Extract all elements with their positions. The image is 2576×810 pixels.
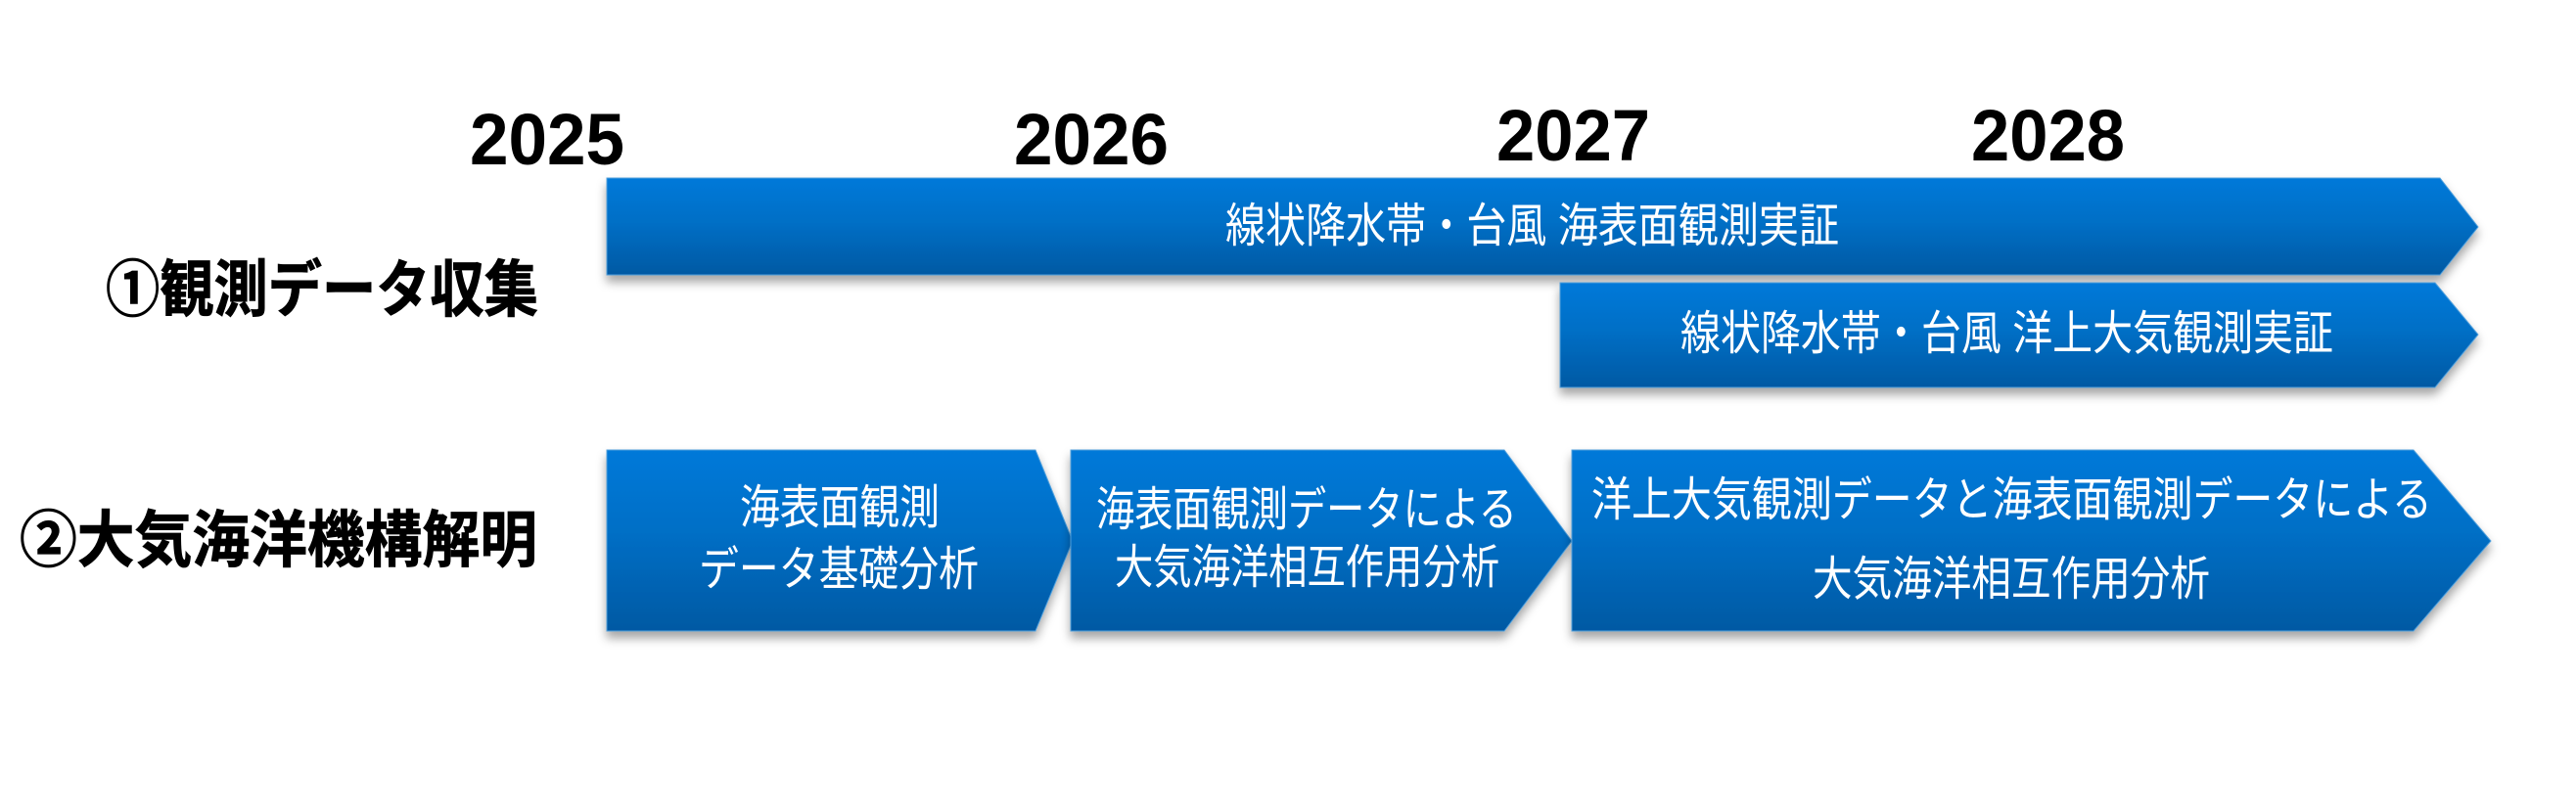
arrow: interaction analysis from marine atmosphere and sea surface data (1572, 450, 2491, 631)
arrow: marine atmosphere observation: 線状降水帯・台風 洋上大気観測実証 (1680, 308, 2333, 360)
arrow: interaction analysis from sea surface data: 海表面観測データによる (1096, 484, 1517, 536)
arrow: basic data analysis (607, 450, 1073, 631)
arrow: interaction analysis from marine atmosphere and sea surface data: 洋上大気観測データと海表面観測データによる (1591, 474, 2432, 526)
arrow: basic data analysis: データ基礎分析 (699, 544, 979, 596)
year 2025: 2025 (470, 99, 624, 180)
arrow: interaction analysis from marine atmosphere and sea surface data: 大気海洋相互作用分析 (1813, 554, 2210, 606)
arrow: sea surface observation: 線状降水帯・台風 海表面観測実証 (1225, 201, 1839, 252)
arrow: marine atmosphere observation (1560, 283, 2478, 387)
arrow: basic data analysis: 海表面観測 (740, 482, 940, 534)
year axis labels (470, 95, 2125, 180)
row heading: air-sea mechanism: ②大気海洋機構解明 (20, 507, 537, 575)
row heading: observation data collection: ①観測データ収集 (106, 256, 538, 325)
year 2026: 2026 (1014, 99, 1169, 180)
year 2027: 2027 (1496, 95, 1650, 176)
year 2028: 2028 (1971, 95, 2125, 176)
arrow: interaction analysis from sea surface data: 大気海洋相互作用分析 (1115, 542, 1499, 594)
arrow: interaction analysis from sea surface data (1071, 450, 1572, 631)
arrow: sea surface observation (607, 178, 2478, 275)
